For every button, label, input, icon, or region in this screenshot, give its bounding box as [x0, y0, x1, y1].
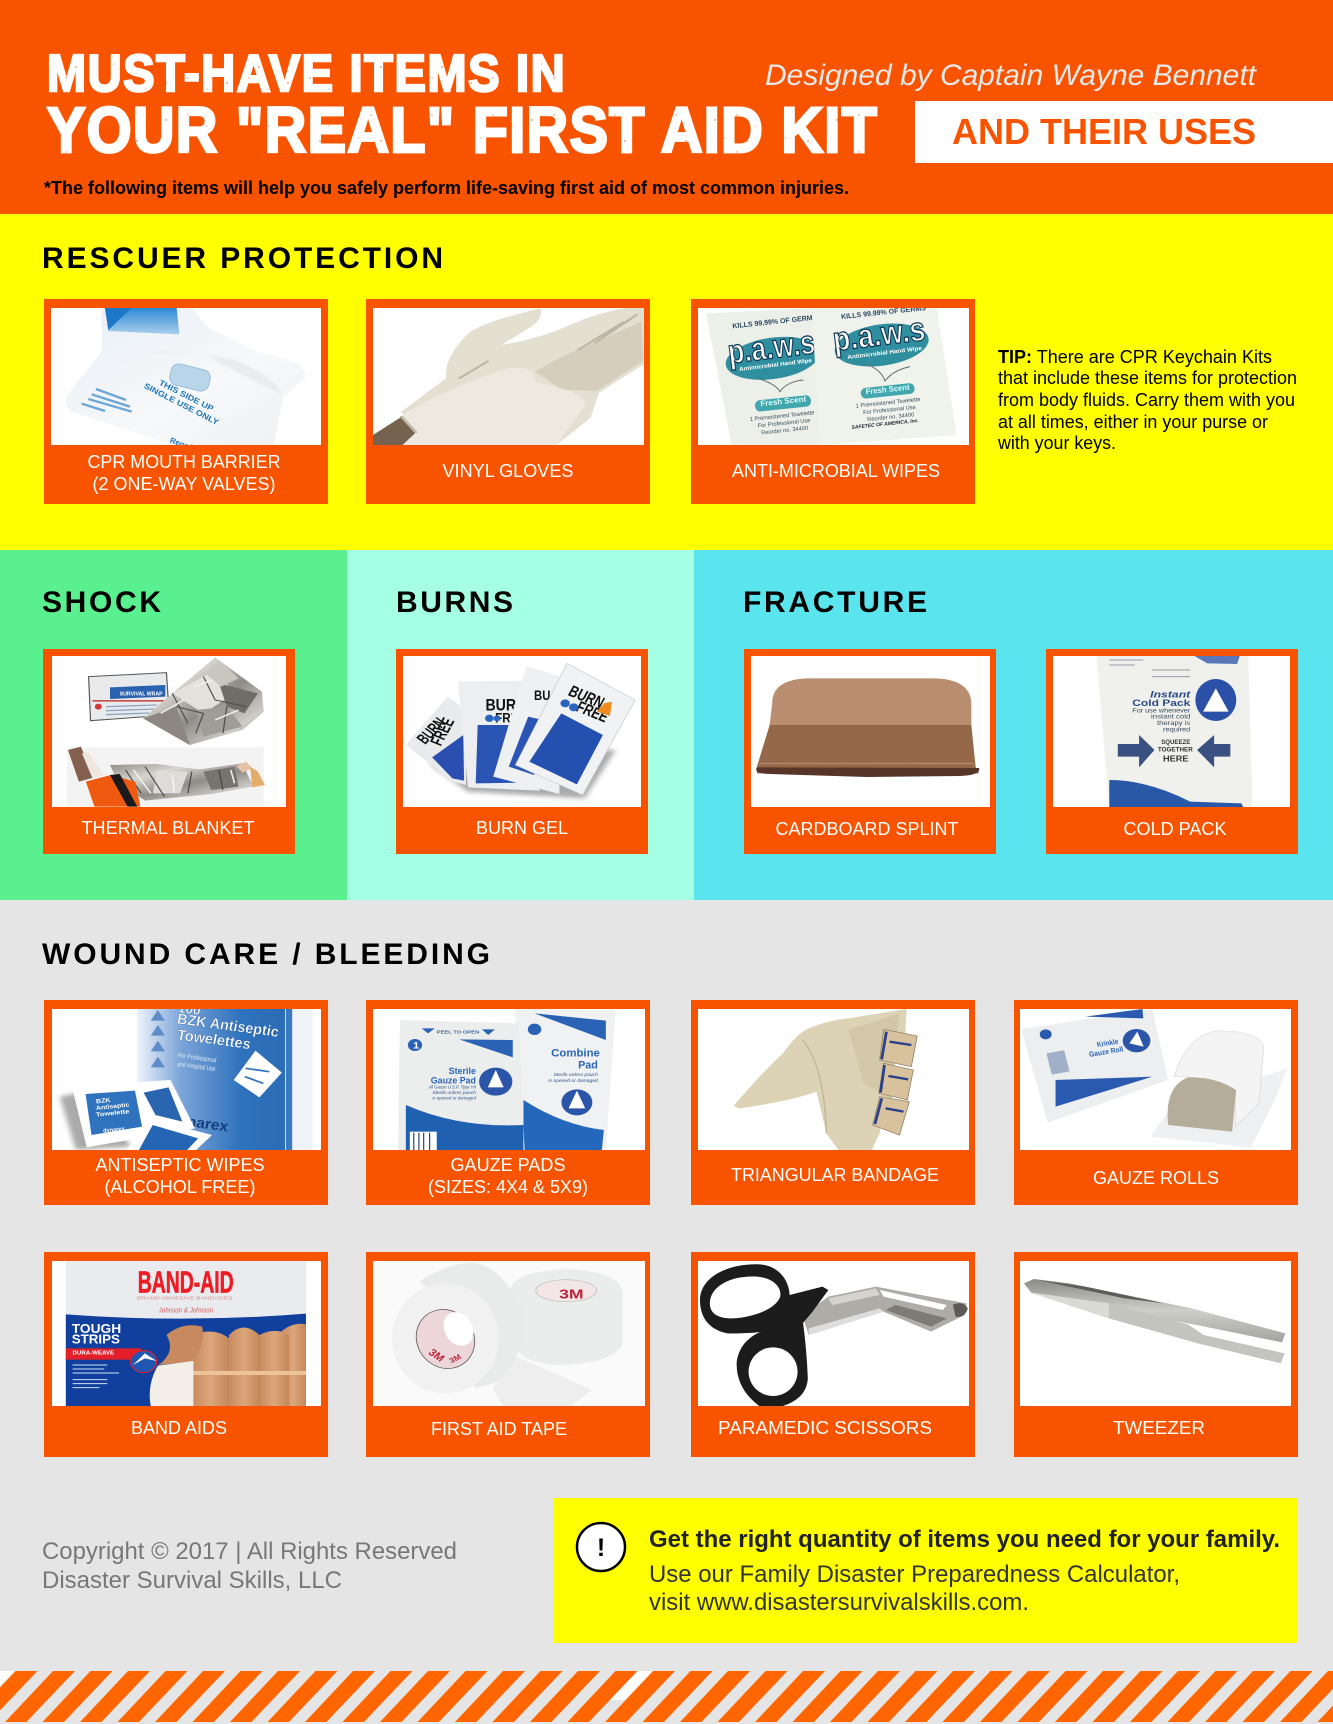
- image: gauze pads: Sterile unless pouch: [554, 1072, 598, 1078]
- image: band aids: BAND-AID: [138, 1266, 234, 1300]
- panel: header: [0, 0, 1333, 214]
- image: gauze rolls: [1020, 1009, 1291, 1150]
- icon: exclamation: !: [597, 1534, 605, 1562]
- image: anti-microbial wipes: p.a.w.s: [726, 324, 817, 372]
- image: antiseptic wipes: Antiseptic: [96, 1102, 130, 1112]
- image: antiseptic wipes: BZK: [96, 1097, 111, 1105]
- image: cold pack: TOGETHER: [1158, 747, 1193, 753]
- image: first aid tape: 3M: [448, 1353, 463, 1365]
- image: anti-microbial wipes: For Professional Use: [863, 405, 916, 416]
- tip text: [997, 347, 1297, 453]
- image: gauze pads: Gauze Pad: [431, 1076, 476, 1086]
- label: PARAMEDIC SCISSORS: [718, 1418, 932, 1438]
- image: antiseptic wipes: dynarex: [103, 1126, 125, 1134]
- image: cold pack: HERE: [1163, 754, 1189, 763]
- image: burn gel: FREE: [495, 711, 526, 726]
- image: anti-microbial wipes: KILLS 99.99% OF GERMS: [841, 305, 927, 321]
- image: thermal blanket: [52, 656, 286, 807]
- image: gauze pads: Pad: [578, 1058, 598, 1071]
- image: band aids: DURA-WEAVE: [73, 1351, 114, 1356]
- image: first aid tape: 3M: [559, 1287, 584, 1302]
- label: TWEEZER: [1113, 1418, 1205, 1438]
- card: antiseptic wipes: [44, 1000, 328, 1205]
- card: tweezer: [1014, 1252, 1298, 1457]
- label: (SIZES: 4X4 & 5X9): [428, 1177, 588, 1197]
- card: CPR mouth barrier: [44, 299, 328, 504]
- tip text: TIP: There are CPR Keychain Kits: [998, 347, 1272, 367]
- image: CPR mouth barrier: SINGLE USE ONLY: [142, 381, 221, 427]
- card: thermal blanket: [43, 649, 295, 854]
- image: cold pack: required: [1163, 727, 1190, 733]
- image: paramedic scissors: [698, 1261, 969, 1406]
- image: band aids: BRAND ADHESIVE BANDAGES: [137, 1296, 233, 1301]
- image: burn gel: BU: [534, 688, 550, 704]
- label: CPR MOUTH BARRIER: [88, 452, 280, 472]
- label: VINYL GLOVES: [442, 461, 574, 481]
- image: anti-microbial wipes: SAFETEC OF AMERICA, Inc.: [851, 418, 919, 431]
- card: anti-microbial wipes: [691, 299, 975, 504]
- image: burn gel: BURN: [413, 714, 450, 747]
- image: gauze rolls: Gauze Roll: [1088, 1045, 1124, 1059]
- image: band aids: [52, 1261, 321, 1406]
- copyright: [42, 1538, 457, 1594]
- image: cold pack: Cold Pack: [1132, 698, 1191, 708]
- image: gauze pads: PEEL TO OPEN: [437, 1030, 479, 1035]
- image: cold pack: therapy is: [1157, 720, 1190, 727]
- card: burn gel: [396, 649, 648, 854]
- image: burn gel: BURN: [485, 696, 526, 714]
- subtitle badge: [915, 101, 1333, 163]
- label: THERMAL BLANKET: [82, 818, 255, 838]
- image: gauze pads: 1: [413, 1041, 419, 1051]
- label: [88, 452, 280, 494]
- image: cold pack: Instant: [1150, 689, 1191, 699]
- image: anti-microbial wipes: Reorder no. 34400: [867, 412, 915, 423]
- callout body: [649, 1561, 1180, 1616]
- image: CPR mouth barrier: [51, 308, 321, 455]
- image: gauze pads: Sterile: [449, 1067, 476, 1077]
- image: anti-microbial wipes: Reorder no. 34400: [761, 426, 809, 437]
- card: triangular bandage: [691, 1000, 975, 1205]
- image: antiseptic wipes: For Professional: [177, 1051, 217, 1064]
- label: ANTI-MICROBIAL WIPES: [732, 461, 940, 481]
- image: anti-microbial wipes: 1 Premoistened Towelette: [750, 410, 815, 423]
- panel: fracture: [694, 550, 1333, 900]
- card: gauze rolls: [1014, 1000, 1298, 1205]
- tip text: with your keys.: [997, 433, 1116, 453]
- heading: shock: SHOCK: [42, 586, 161, 619]
- label: ANTISEPTIC WIPES: [96, 1155, 264, 1175]
- callout: family calculator: [554, 1498, 1297, 1643]
- panel: shock: [0, 550, 347, 900]
- label: BURN GEL: [476, 818, 568, 838]
- image: gauze pads: is opened or damaged: [432, 1096, 476, 1101]
- subtitle badge: AND THEIR USES: [952, 111, 1256, 152]
- image: triangular bandage: [698, 1009, 969, 1150]
- image: CPR mouth barrier: THIS SIDE UP: [157, 378, 216, 414]
- image: cold pack: instant cold: [1151, 714, 1190, 720]
- card: paramedic scissors: [691, 1252, 975, 1457]
- image: burn gel: FREE: [573, 697, 612, 726]
- label: CARDBOARD SPLINT: [776, 819, 958, 839]
- tip text: at all times, either in your purse or: [998, 412, 1268, 432]
- heading: rescuer protection: RESCUER PROTECTION: [42, 242, 443, 275]
- label: [428, 1155, 588, 1197]
- image: antiseptic wipes: [52, 1002, 321, 1150]
- image: tweezer: [1020, 1261, 1291, 1406]
- image: gauze pads: All Gauze U.S.P. Type VII: [428, 1085, 477, 1090]
- image: antiseptic wipes: Towelette: [96, 1109, 130, 1118]
- label: (ALCOHOL FREE): [104, 1177, 256, 1197]
- title line 2: YOUR "REAL" FIRST AID KIT: [47, 94, 877, 166]
- label: BAND AIDS: [131, 1418, 227, 1438]
- tip text: from body fluids. Carry them with you: [998, 390, 1295, 410]
- label: TRIANGULAR BANDAGE: [731, 1165, 939, 1185]
- image: band aids: TOUGH: [72, 1321, 121, 1336]
- copyright: Copyright © 2017 | All Rights Reserved: [42, 1538, 457, 1565]
- heading: burns: BURNS: [396, 586, 513, 619]
- callout body: Use our Family Disaster Preparedness Calculator,: [649, 1561, 1180, 1588]
- image: vinyl gloves: [373, 308, 644, 445]
- card: vinyl gloves: [366, 299, 650, 504]
- image: gauze pads: is opened or damaged: [548, 1078, 599, 1084]
- panel: rescuer protection: [0, 214, 1333, 550]
- card: gauze pads: [366, 1000, 650, 1205]
- card: first aid tape: [366, 1252, 650, 1457]
- panel: wound care and bleeding: [0, 900, 1333, 1460]
- image: cold pack: SQUEEZE: [1161, 739, 1190, 746]
- callout heading: Get the right quantity of items you need for your family.: [649, 1526, 1280, 1553]
- label: [96, 1155, 264, 1197]
- footnote: *The following items will help you safely perform life-saving first aid of most common injuries.: [44, 178, 849, 198]
- image: anti-microbial wipes: Fresh Scent: [865, 383, 910, 396]
- hazard stripe band: [0, 1671, 1333, 1722]
- card: cold pack: [1046, 649, 1298, 854]
- icon: exclamation: [577, 1523, 625, 1571]
- image: burn gel: FREE: [426, 715, 459, 748]
- image: gauze pads: Sterile unless pouch: [432, 1090, 476, 1096]
- image: anti-microbial wipes: Fresh Scent: [760, 395, 807, 408]
- image: band aids: Johnson & Johnson: [158, 1306, 214, 1314]
- image: antiseptic wipes: Towelettes: [176, 1027, 252, 1053]
- image: anti-microbial wipes: Antimicrobial Hand Wipe: [847, 346, 922, 361]
- tip text: that include these items for protection: [998, 368, 1297, 388]
- image: cold pack: [1053, 656, 1290, 807]
- image: CPR mouth barrier: Reorder: [169, 436, 201, 455]
- label: (2 ONE-WAY VALVES): [92, 474, 276, 494]
- image: antiseptic wipes: and Hospital Use: [176, 1060, 216, 1073]
- label: GAUZE PADS: [450, 1155, 566, 1175]
- image: antiseptic wipes: narex: [186, 1113, 230, 1135]
- image: antiseptic wipes: 100: [177, 1002, 202, 1018]
- designer credit: Designed by Captain Wayne Bennett: [765, 59, 1258, 92]
- image: burn gel: BURN: [565, 682, 608, 712]
- image: cold pack: For use whenever: [1132, 707, 1190, 714]
- card: cardboard splint: [744, 649, 996, 854]
- image: gauze pads: [373, 1009, 645, 1150]
- copyright: Disaster Survival Skills, LLC: [42, 1567, 342, 1594]
- callout body: visit www.disastersurvivalskills.com.: [649, 1589, 1029, 1616]
- label: GAUZE ROLLS: [1093, 1168, 1219, 1188]
- label: FIRST AID TAPE: [431, 1419, 567, 1439]
- panel: burns: [347, 550, 694, 900]
- title line 1: MUST-HAVE ITEMS IN: [47, 45, 565, 103]
- image: gauze rolls: Krinkle: [1096, 1037, 1120, 1049]
- image: first aid tape: [373, 1261, 645, 1406]
- image: anti-microbial wipes: p.a.w.s: [831, 311, 927, 359]
- image: anti-microbial wipes: 1 Premoistened Towelette: [856, 397, 921, 410]
- image: thermal blanket: SURVIVAL WRAP: [120, 691, 163, 697]
- image: first aid tape: 3M: [426, 1347, 447, 1364]
- image: anti-microbial wipes: [698, 305, 969, 445]
- card: band aids: [44, 1252, 328, 1457]
- image: anti-microbial wipes: Antimicrobial Hand Wipe: [739, 358, 812, 373]
- heading: fracture: FRACTURE: [743, 586, 927, 619]
- image: anti-microbial wipes: KILLS 99.99% OF GERMS: [732, 314, 818, 330]
- image: burn gel: [403, 656, 641, 807]
- image: gauze pads: Combine: [551, 1047, 600, 1059]
- image: band aids: STRIPS: [72, 1332, 120, 1346]
- label: COLD PACK: [1124, 819, 1226, 839]
- image: cardboard splint: [751, 656, 990, 807]
- image: antiseptic wipes: BZK Antiseptic: [176, 1011, 280, 1041]
- image: anti-microbial wipes: For Professional Use: [758, 418, 811, 430]
- heading: wound care: WOUND CARE / BLEEDING: [42, 938, 490, 971]
